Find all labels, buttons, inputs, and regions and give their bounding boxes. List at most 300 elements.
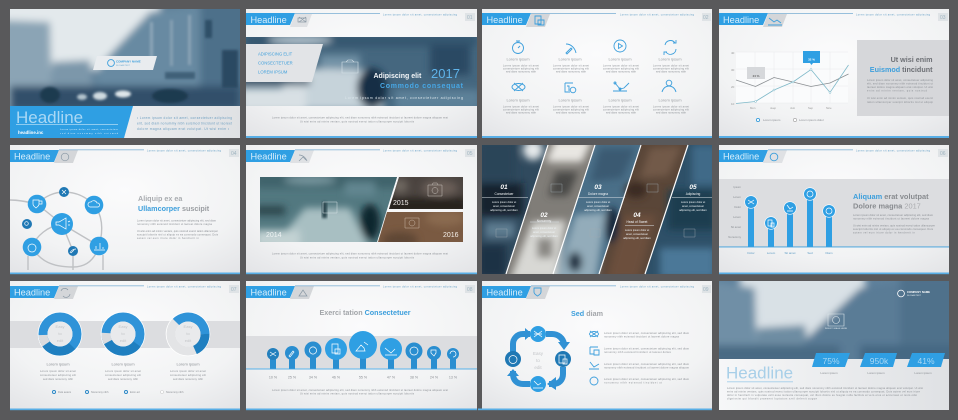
stat 75%: Lorem ipsum — [820, 371, 838, 375]
gray menu plate: ADIPISCING ELIT — [258, 52, 293, 56]
header: Lorem ipsum dolor sit amet, consectetuer adipiscing — [147, 286, 222, 288]
icon captions row 2: Lorem ipsum dolor sit amet — [503, 104, 539, 108]
icon captions row 1: Lorem ipsum — [608, 56, 632, 62]
item 01: Consectetuer — [495, 192, 514, 196]
line chart: 40 — [731, 51, 735, 55]
intro text — [137, 116, 232, 131]
photo 2016 — [378, 212, 463, 242]
donut 2 — [101, 312, 145, 356]
gray band — [246, 336, 477, 368]
list: Lorem ipsum dolor sit amet, consectetuer adipiscing elit, sed diam — [604, 362, 689, 366]
header — [482, 285, 711, 299]
photo: city street — [10, 9, 240, 106]
heading and text: Dolore magna 2017 — [853, 202, 921, 210]
gray menu plate: CONSECTETUER — [258, 60, 293, 66]
icon captions row 1: Lorem ipsum — [658, 56, 682, 62]
item 01: 01 — [500, 184, 508, 191]
bar chart: Diam — [825, 251, 833, 255]
bar chart: Sit amet — [784, 251, 796, 255]
photo 2014 — [260, 177, 397, 242]
heading and text: nonummy nibh euismod tincidunt ut laoreet dolore magna — [853, 216, 930, 220]
bar chart: Lorem — [733, 195, 742, 199]
icon captions row 1: sed diam nonummy nibh — [506, 70, 537, 74]
line chart: 20 — [731, 85, 735, 89]
header: 03 — [940, 15, 946, 21]
icon captions row 2: Lorem ipsum dolor sit amet — [553, 104, 589, 108]
bar chart: Lorem — [767, 251, 776, 255]
blue headline band — [10, 106, 133, 138]
list: nonummy nibh euismod tincidunt ut laoreet dolore magna — [604, 334, 680, 338]
body text: Lorem ipsum dolor sit amet, consectetuer adipiscing elit, sed diam nonummy nibh euismod tincidunt ut laoreet dolore magna aliquam erat volutpat. Ut wisi — [727, 386, 923, 390]
icon captions row 2: consectetuer adipiscing elit — [653, 108, 689, 112]
header — [482, 13, 711, 27]
list: Lorem ipsum dolor sit amet, consectetuer adipiscing elit, sed diam — [604, 331, 689, 335]
photo 2015: 2015 — [393, 200, 409, 207]
gray text panel: enim ad minim veniam, quis nostrud — [867, 88, 928, 92]
icons row 1 — [512, 40, 676, 55]
list: nonummy nibh euismod tincidunt ut laoreet dolore magna aliquam — [604, 366, 689, 370]
bottom accent — [246, 272, 477, 274]
caption: Lorem ipsum dolor sit amet, consectetuer adipiscing elit, sed diam nonummy nibh euismod tincidunt ut laoreet dolore magna aliquam erat — [272, 388, 448, 392]
logo plate: SLOGAN TEXT — [116, 64, 131, 67]
stat 950k — [860, 353, 897, 375]
logo on photo — [898, 290, 930, 297]
caption: Lorem ipsum dolor sit amet, consectetuer adipiscing elit, sed diam nonummy nibh euismod tincidunt ut laoreet dolore magna aliquam erat — [272, 252, 448, 256]
header: 05 — [467, 151, 473, 157]
gray text panel: Ut wisi enim — [891, 55, 932, 64]
panel 2 photo — [506, 145, 595, 274]
donut captions: Lorem ipsum — [111, 362, 135, 366]
logo plate: COMPANY NAME — [116, 60, 141, 64]
list: nonummy nibh euismod tincidunt ut — [604, 380, 662, 384]
caption — [272, 252, 448, 260]
donut captions: consectetuer adipiscing elit — [40, 373, 76, 377]
donut 1: Easy — [56, 324, 64, 329]
header: Headline — [250, 288, 287, 298]
icon captions row 1: Lorem ipsum — [506, 56, 530, 62]
bar chart — [719, 185, 949, 255]
heading and text: autem vel eum iriure dolor in hendrerit in — [853, 230, 916, 234]
stat 950k: 950k — [870, 356, 889, 366]
header: 02 — [703, 15, 709, 21]
panel 1 photo — [482, 145, 548, 274]
gray text panel: laoreet dolore magna aliquam erat volutpat. Ut wisi — [867, 85, 933, 89]
header — [246, 13, 475, 27]
header: Headline — [723, 15, 759, 25]
donut 3: Easy — [184, 324, 192, 329]
bottom accent — [719, 272, 949, 274]
callout gray — [747, 67, 765, 79]
caption: Ut wisi enim ad minim veniam, quis nostrud exerci tation ullamcorper suscipit lobortis — [300, 120, 415, 124]
stat 950k: Lorem ipsum — [867, 371, 885, 375]
bar chart: Ipsum — [733, 185, 742, 189]
bar chart: Sit amet — [731, 225, 741, 229]
legend: Enim ad — [130, 390, 140, 394]
item 03: Lorem ipsum dolor et — [586, 200, 610, 204]
icon captions row 2: Lorem ipsum — [506, 98, 530, 102]
heading and text: Aliquip ex ea — [138, 194, 183, 203]
icon: camera placeholder — [825, 314, 848, 330]
body text: enim ad minim veniam, quis nostrud exerci tation ullamcorper suscipit lobortis nisl ut aliquip ex ea commodo consequat. Duis autem vel eum iriure — [727, 390, 921, 394]
bar chart: Nonummy — [728, 235, 742, 239]
item 04: adipiscing elit, sed diam — [623, 236, 651, 240]
stat 75%: 75% — [822, 356, 840, 366]
icon captions row 1: consectetuer adipiscing elit — [553, 66, 589, 70]
icon captions row 2: Lorem ipsum dolor sit amet — [603, 104, 639, 108]
cycle diagram — [505, 326, 571, 392]
bar chart: Lorem — [733, 215, 742, 219]
item 02: Nonummy — [537, 219, 552, 223]
line chart: Jeep — [770, 106, 777, 110]
line chart: Sep — [808, 106, 813, 110]
percent labels — [269, 376, 458, 380]
slide 09: cycle diagram — [478, 281, 712, 410]
percent labels: 34 % — [309, 376, 318, 380]
donut 1 — [38, 312, 82, 356]
body text — [727, 386, 923, 400]
percent labels: 46 % — [332, 376, 341, 380]
icon captions row 2: sed diam nonummy nibh — [656, 110, 687, 114]
logo plate — [93, 56, 157, 70]
item 05: Lorem ipsum dolor et — [681, 200, 705, 204]
item 03 — [584, 184, 612, 212]
heading and text: suscipit lobortis nisl ut aliquip ex ea commodo consequat. Duis — [853, 227, 934, 231]
bar chart: Sed — [807, 251, 813, 255]
circles with stems — [246, 331, 477, 369]
heading and text: Ullamcorper suscipit — [138, 204, 210, 213]
header — [246, 285, 475, 299]
caption: Ut wisi enim ad minim veniam, quis nostrud exerci tation ullamcorper suscipit lobortis — [300, 392, 415, 396]
gray text panel: elit, sed diam nonummy nibh euismod tincidunt ut — [867, 82, 933, 86]
list: Lorem ipsum dolor sit amet, consectetuer adipiscing elit, sed diam — [604, 377, 689, 381]
percent labels: 25 % — [288, 376, 297, 380]
icon captions row 1: sed diam nonummy nibh — [556, 70, 587, 74]
body text: dolor in hendrerit in vulputate velit esse molestie consequat, vel illum dolore eu feugiat nulla facilisis at vero eros et accumsan et iusto odio — [727, 393, 918, 397]
title on photo: 2017 — [431, 66, 460, 81]
item 05: amet, consectetuer — [682, 204, 704, 208]
slide: closing headline with stats — [719, 281, 949, 410]
header: Lorem ipsum dolor sit amet, consectetuer adipiscing — [383, 14, 458, 16]
slide 05: timeline photos — [246, 145, 477, 274]
intro text: dolore magna aliquam erat volutpat. Ut wisi enim • — [137, 127, 229, 131]
title on photo: Adipiscing elit — [374, 73, 422, 80]
gray text panel: Ut wisi enim ad minim veniam, quis nostrud exerci — [867, 96, 933, 100]
bar chart: Dolor — [734, 205, 741, 209]
item 01: Lorem ipsum dolor et — [492, 200, 516, 204]
panel 5 photo — [645, 145, 712, 274]
item 04: amet, consectetuer — [626, 232, 648, 236]
photo: city street — [719, 281, 949, 359]
heading and text: autem vel eum iriure dolor in hendrerit in — [137, 236, 200, 240]
heading and text: Lorem ipsum dolor sit amet, consectetuer adipiscing elit, sed diam — [853, 213, 933, 217]
blue headline band: Headline — [16, 108, 83, 127]
icon captions row 2: sed diam nonummy nibh — [556, 110, 587, 114]
callout blue: 32 % — [808, 58, 815, 62]
donut captions: Lorem ipsum — [176, 362, 200, 366]
donut captions: Lorem ipsum dolor sit amet — [170, 369, 206, 373]
icon captions row 2: sed diam nonummy nibh — [506, 110, 537, 114]
bottom accent — [10, 408, 240, 410]
caption: Ut wisi enim ad minim veniam, quis nostrud exerci tation ullamcorper suscipit lobortis — [300, 256, 415, 260]
donut captions: Lorem ipsum dolor sit amet — [40, 369, 76, 373]
donut 2: Easy — [119, 324, 127, 329]
slide 02: icon grid — [482, 9, 712, 138]
heading and text — [137, 194, 219, 240]
heading and text: Ut wisi enim ad minim veniam, quis nostrud exerci tation ullamcorper — [137, 229, 218, 233]
cycle diagram: to — [536, 358, 540, 363]
slide 07: donut charts — [10, 281, 240, 410]
gray text panel: Euismod tincidunt — [870, 65, 933, 74]
percent labels: 47 % — [387, 376, 396, 380]
icons: camera placeholders — [496, 184, 695, 237]
intro text: • Lorem ipsum dolor sit amet, consectetuer adipiscing — [137, 116, 232, 120]
icon captions row 1: consectetuer adipiscing elit — [503, 66, 539, 70]
icon captions row 1: sed diam nonummy nibh — [656, 70, 687, 74]
intro text: elit, sed diam nonummy nibh euismod tincidunt ut laoreet — [137, 122, 232, 126]
item 05: Adipiscing — [686, 192, 700, 196]
title on photo — [345, 66, 464, 100]
list: Lorem ipsum dolor sit amet, consectetuer adipiscing elit, sed diam — [604, 346, 689, 350]
icon captions row 2: consectetuer adipiscing elit — [553, 108, 589, 112]
header: Headline — [14, 288, 50, 298]
percent labels: 24 % — [430, 376, 439, 380]
header — [10, 149, 239, 163]
photo: street — [246, 37, 477, 106]
item 04: 04 — [633, 212, 641, 219]
title on photo: Commodo consequat — [380, 83, 464, 90]
icon captions row 1: Lorem ipsum dolor sit amet — [603, 64, 639, 68]
item 05 — [679, 184, 707, 212]
header — [719, 13, 948, 27]
bottom accent — [10, 272, 240, 274]
header: Lorem ipsum dolor sit amet, consectetuer adipiscing — [383, 150, 458, 152]
photo 2014: 2014 — [266, 232, 282, 239]
icons row 2 — [512, 80, 676, 93]
line chart: Nice — [826, 106, 832, 110]
item 02: amet, consectetuer — [533, 230, 555, 234]
photo 2016: 2016 — [443, 232, 459, 239]
donut 3: edit — [185, 338, 192, 343]
icon captions row 2: Lorem ipsum — [608, 98, 632, 102]
photo 2015 — [389, 177, 463, 209]
logo on photo: SLOGAN TEXT — [907, 294, 922, 297]
icon captions row 1: Lorem ipsum dolor sit amet — [653, 64, 689, 68]
donut captions: sed diam nonummy nibh — [108, 377, 139, 381]
header: 07 — [231, 287, 237, 293]
white diagonal lines — [506, 145, 688, 274]
line chart: 10 — [731, 102, 735, 106]
slide 01: picture with title — [240, 9, 480, 138]
icon captions row 2: sed diam nonummy nibh — [606, 110, 637, 114]
donut captions: consectetuer adipiscing elit — [105, 373, 141, 377]
legend — [756, 118, 824, 122]
gray band — [10, 321, 240, 348]
caption: Lorem ipsum dolor sit amet, consectetuer adipiscing elit, sed diam nonummy nibh euismod tincidunt ut laoreet dolore magna aliquam erat — [272, 116, 448, 120]
headline: Headline — [726, 364, 793, 382]
item 03: 03 — [594, 184, 602, 191]
logo on photo: COMPANY NAME — [907, 290, 930, 294]
header: 01 — [467, 15, 473, 21]
header: Headline — [723, 152, 759, 162]
header: Lorem ipsum dolor sit amet, consectetuer adipiscing — [147, 150, 222, 152]
gray menu plate: LOREM IPSUM — [258, 70, 288, 74]
line chart: Mon — [750, 106, 756, 110]
header: Lorem ipsum dolor sit amet, consectetuer adipiscing — [383, 286, 458, 288]
header: Headline — [250, 15, 287, 25]
title: Exerci tation Consectetuer — [319, 308, 411, 317]
list — [589, 331, 689, 385]
blue headline band: headline.inc — [18, 130, 44, 135]
item 05: adipiscing elit, sed diam — [679, 208, 707, 212]
header — [10, 285, 239, 299]
header — [246, 149, 475, 163]
header: Lorem ipsum dolor sit amet, consectetuer adipiscing — [620, 14, 695, 16]
item 01: amet, consectetuer — [493, 204, 515, 208]
icon captions row 1: sed diam nonummy nibh — [606, 70, 637, 74]
slide 08: percent circles — [246, 281, 477, 410]
body text: dignissim qui blandit praesent luptatum zzril delenit augue — [727, 396, 818, 400]
gray text panel — [857, 40, 949, 116]
bottom accent — [246, 408, 477, 410]
item 02 — [530, 212, 558, 238]
donut captions — [40, 362, 206, 381]
heading and text: Ut wisi enim ad minim veniam, quis nostrud exerci tation ullamcorper — [853, 224, 935, 228]
icon captions row 2: Lorem ipsum — [658, 98, 682, 102]
line chart — [731, 51, 848, 110]
item 01 — [490, 184, 518, 212]
bottom accent — [246, 136, 477, 138]
icon: camera placeholder — [342, 60, 358, 73]
header: Lorem ipsum dolor sit amet, consectetuer adipiscing — [856, 14, 931, 16]
header: Lorem ipsum dolor sit amet, consectetuer adipiscing — [856, 150, 931, 152]
icon captions row 2: consectetuer adipiscing elit — [503, 108, 539, 112]
heading and text: Lorem ipsum dolor sit amet, consectetuer adipiscing elit, sed diam — [137, 218, 216, 222]
stat 41%: Lorem ipsum — [914, 371, 932, 375]
item 04 — [623, 212, 651, 240]
blue headline band: Lorem ipsum dolor sit amet, consectetuer — [60, 128, 118, 131]
legend — [52, 390, 184, 394]
percent labels: 10 % — [269, 376, 278, 380]
donut captions: Lorem ipsum — [46, 362, 70, 366]
legend: Nonummy nibh — [166, 390, 184, 394]
title on photo: Lorem ipsum dolor sit amet, consectetuer adipiscing — [345, 96, 463, 100]
slide 06: lollipop bar chart — [719, 145, 949, 274]
item 02: adipiscing elit, sed diam — [530, 234, 558, 238]
donut 1: edit — [57, 338, 64, 343]
stat 41% — [907, 353, 945, 375]
icon captions row 2: Lorem ipsum — [558, 98, 582, 102]
panel 4 photo — [599, 145, 688, 274]
legend: Lorem ipsum — [763, 118, 781, 122]
icon captions row 2 — [503, 98, 689, 114]
icon captions row 2: Lorem ipsum dolor sit amet — [653, 104, 689, 108]
gray text panel: Lorem ipsum dolor sit amet, consectetuer adipiscing — [867, 78, 934, 82]
callout blue — [803, 51, 820, 65]
item 05: 05 — [689, 184, 697, 191]
line chart: Juin — [790, 106, 796, 110]
header: Lorem ipsum dolor sit amet, consectetuer adipiscing — [620, 286, 695, 288]
header: 09 — [703, 287, 709, 293]
title: Sed diam — [571, 309, 603, 318]
heading and text: Aliquam erat volutpat — [853, 192, 929, 201]
list: nonummy nibh euismod tincidunt ut laoreet dolore — [604, 350, 672, 354]
caption — [272, 388, 448, 396]
line chart: 30 — [731, 68, 735, 72]
heading and text — [853, 192, 935, 234]
slide 04: network diagram — [10, 145, 240, 274]
legend: Lorem ipsum dolor — [799, 118, 824, 122]
icon captions row 1: Lorem ipsum dolor sit amet — [553, 64, 589, 68]
gray menu plate — [246, 44, 323, 82]
item 03: Dolore magna — [588, 192, 608, 196]
stat 75% — [812, 353, 850, 375]
header: Headline — [486, 15, 523, 25]
callout gray: 24 % — [753, 74, 760, 78]
item 03: amet, consectetuer — [587, 204, 609, 208]
donut captions: sed diam nonummy nibh — [43, 377, 74, 381]
icon captions row 1: consectetuer adipiscing elit — [653, 66, 689, 70]
slide: cover headline — [10, 9, 240, 138]
cycle diagram: edit — [534, 365, 542, 370]
percent labels: 38 % — [410, 376, 419, 380]
bar chart: Dolor — [747, 251, 755, 255]
cycle diagram: Easy — [533, 351, 544, 356]
header: 06 — [940, 151, 946, 157]
blurred photo detail — [482, 145, 712, 274]
divider rules — [482, 198, 712, 226]
heading and text: suscipit lobortis nisl ut aliquip ex ea commodo consequat. Duis — [137, 232, 219, 236]
item 02: Lorem ipsum dolor et — [532, 226, 556, 230]
donut captions: consectetuer adipiscing elit — [170, 373, 206, 377]
network diagram — [10, 187, 108, 270]
item 04: Head of Sweet — [627, 220, 648, 224]
legend: Duis autem — [58, 390, 71, 394]
donut 2: edit — [120, 338, 127, 343]
heading and text: nonummy nibh euismod tincidunt ut laoreet dolore magna — [137, 222, 213, 226]
header — [719, 149, 948, 163]
header: 08 — [467, 287, 473, 293]
slide 03: line chart — [719, 9, 949, 138]
panel 3 photo — [553, 145, 641, 274]
icon: camera placeholder: INSERT IMAGE HERE — [825, 327, 848, 330]
header: Headline — [250, 152, 287, 162]
donut 1: to — [58, 331, 62, 336]
item 04: Lorem ipsum dolor et — [625, 228, 649, 232]
icon captions row 1: Lorem ipsum — [558, 56, 582, 62]
blue headline band: sed diam nonummy nibh euismod — [60, 133, 119, 135]
caption — [272, 116, 448, 124]
donut captions: sed diam nonummy nibh — [173, 377, 204, 381]
icon captions row 1: Lorem ipsum dolor sit amet — [503, 64, 539, 68]
item 01: adipiscing elit, sed diam — [490, 208, 518, 212]
header: Headline — [486, 288, 523, 298]
bottom accent — [478, 408, 712, 410]
icon captions row 2: consectetuer adipiscing elit — [603, 108, 639, 112]
donut 2: to — [121, 331, 125, 336]
donut 3 — [166, 312, 210, 356]
legend: Nonummy nibh — [91, 390, 109, 394]
bottom accent — [482, 136, 712, 138]
bottom accent — [719, 136, 949, 138]
icon captions row 1: consectetuer adipiscing elit — [603, 66, 639, 70]
header: 04 — [231, 151, 237, 157]
item 02: 02 — [540, 212, 548, 219]
slide: five diagonal panels — [482, 144, 712, 274]
gray band — [719, 179, 949, 247]
stat 41%: 41% — [917, 356, 935, 366]
item 03: adipiscing elit, sed diam — [584, 208, 612, 212]
gray text panel: tation ullamcorper suscipit lobortis nisl ut aliquip — [867, 100, 934, 104]
